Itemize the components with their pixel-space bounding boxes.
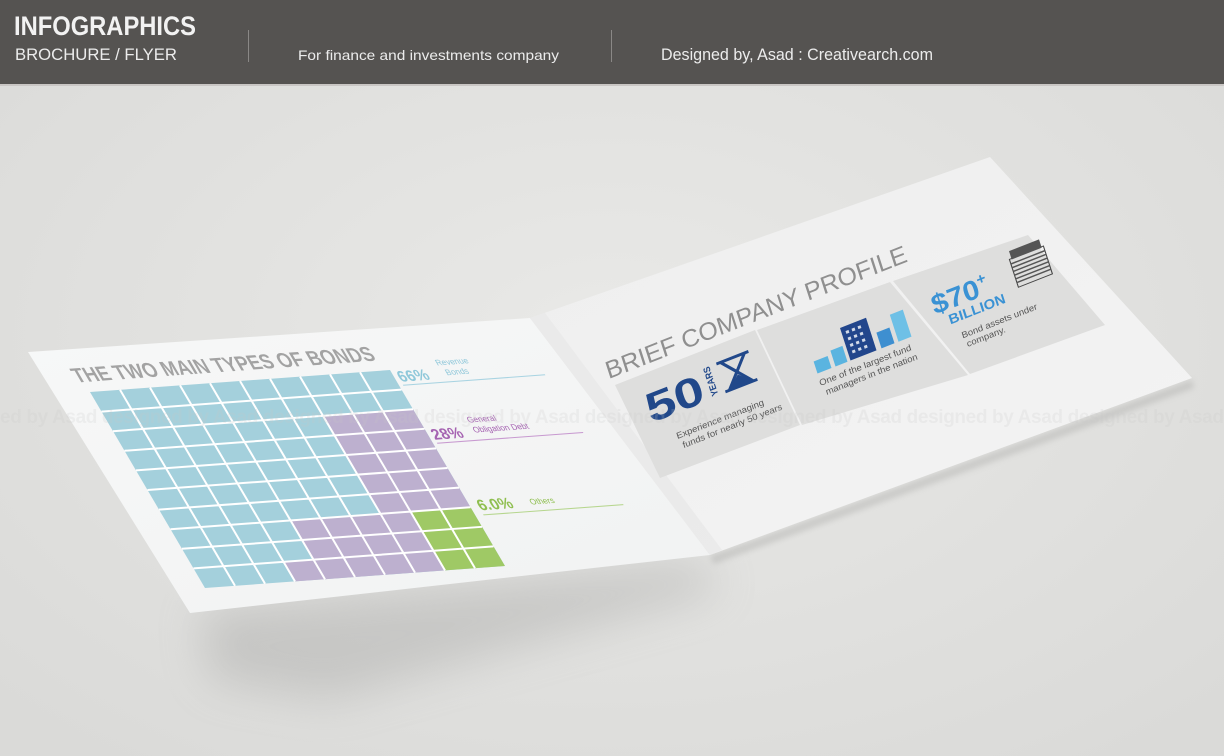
right page (530, 157, 1192, 555)
label: revenue bonds: Bonds (443, 366, 472, 377)
header subtitle: BROCHURE / FLYER (15, 45, 177, 64)
big number 70 billion: + (974, 270, 988, 289)
right page: BILLION (947, 292, 1007, 328)
waffle chart (90, 370, 505, 588)
watermark: ed by Asad designed by Asad designed by Asad designed by Asad designed by Asad designed by Asad designed by Asad designed by Asad (0, 407, 1224, 428)
brochure shadow (200, 380, 1194, 700)
icon: money stack (1007, 239, 1052, 287)
icon: buildings (807, 304, 912, 374)
header bar (0, 0, 1224, 86)
right page title: BRIEF COMPANY PROFILE (602, 241, 910, 385)
big number 50: 50 (640, 367, 710, 432)
left page title: THE TWO MAIN TYPES OF BONDS (66, 342, 380, 387)
header title: INFOGRAPHICS (14, 11, 196, 41)
label: revenue bonds: Revenue (433, 356, 471, 367)
label: others: Others (527, 495, 557, 506)
header credit: Designed by, Asad : Creativearch.com (661, 45, 933, 64)
right page: company. (965, 325, 1007, 349)
label: general obligation debt: 28% (427, 425, 468, 443)
label: others: 6.0% (473, 495, 518, 514)
label: general obligation debt: General (465, 413, 498, 424)
big number 70 billion: $70 (928, 274, 984, 321)
label: revenue bonds (389, 351, 545, 386)
icon: hourglass (716, 351, 757, 392)
text: bond assets: Bond assets under (960, 302, 1038, 340)
right page: managers in the nation (824, 352, 919, 397)
label: general obligation debt: Obligation Debt (470, 421, 531, 434)
text: largest fund managers: One of the largest fund (818, 343, 912, 388)
years label: YEARS (701, 365, 720, 398)
stat box: fund managers (757, 282, 968, 425)
label: revenue bonds: 66% (393, 367, 434, 385)
label: others (473, 487, 624, 515)
label: general obligation debt (423, 408, 583, 444)
stat box: 70 billion (893, 235, 1105, 374)
stat box: 50 years (615, 330, 800, 478)
right page: funds for nearly 50 years (681, 402, 784, 450)
left page (28, 318, 710, 613)
header description: For finance and investments company (298, 47, 559, 63)
text: experience: Experience managing (675, 398, 765, 441)
